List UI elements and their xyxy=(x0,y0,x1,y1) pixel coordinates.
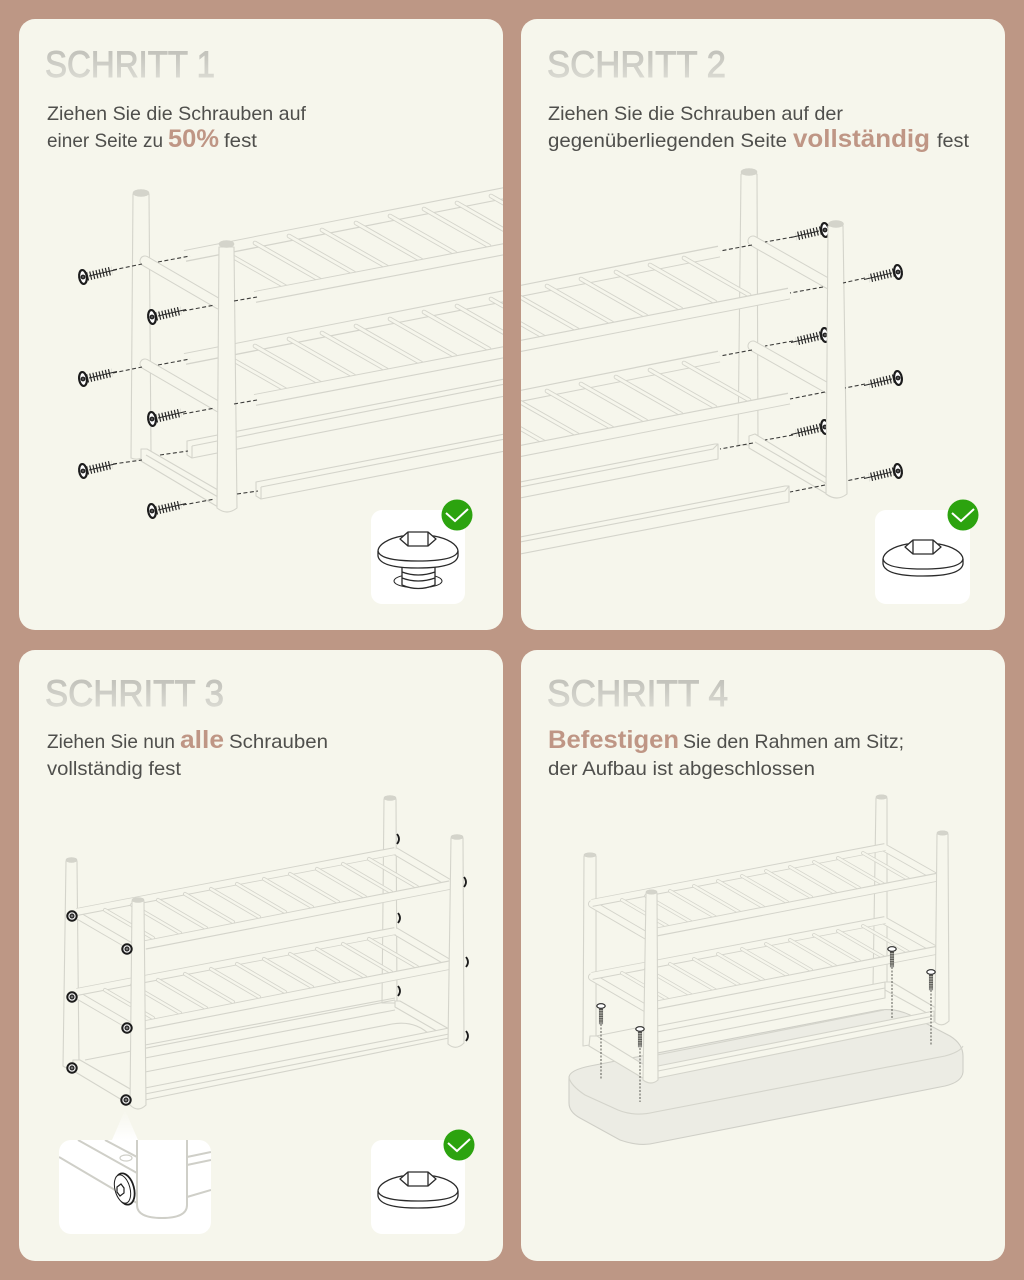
bottom frame xyxy=(589,982,936,1080)
back posts xyxy=(63,796,397,1069)
panel: Schritt 1 xyxy=(19,19,556,630)
text block: Schritt 4 instruction: der Aufbau ist abgeschlossen xyxy=(548,758,815,780)
text block: Schritt 3 instruction: Ziehen Sie nun xyxy=(47,731,175,753)
front post xyxy=(826,220,847,498)
heading: Schritt 2: SCHRITT 2 xyxy=(547,44,726,85)
lower shelf xyxy=(479,356,790,452)
text block: Schritt 1 instruction xyxy=(47,103,307,153)
icon: check mark xyxy=(444,1130,474,1160)
text block: Schritt 4 instruction xyxy=(548,726,904,780)
text block: Schritt 2 instruction: vollständig xyxy=(793,125,930,153)
lower shelf xyxy=(591,920,939,1005)
text block: Schritt 2 instruction: fest xyxy=(937,130,970,152)
side rails xyxy=(77,851,451,1027)
text block: Schritt 4 instruction: Befestigen xyxy=(548,726,679,754)
icon: check mark xyxy=(442,500,472,530)
dashed screw guides xyxy=(601,967,931,1102)
detail card: screw tight xyxy=(875,500,978,604)
rack on seat diagram xyxy=(569,795,963,1144)
back post xyxy=(738,168,758,445)
side rails xyxy=(749,241,829,494)
text block: Schritt 2 instruction xyxy=(548,103,970,153)
back posts xyxy=(583,795,887,1046)
back post xyxy=(131,190,151,459)
upper shelf xyxy=(76,851,451,945)
text block: Schritt 1 instruction: fest xyxy=(224,130,258,152)
text block: Schritt 3 instruction: Schrauben xyxy=(229,731,328,753)
heading: Schritt 3: SCHRITT 3 xyxy=(45,673,224,714)
dashed screw guides xyxy=(720,237,865,492)
screws xyxy=(597,947,935,1047)
heading: Schritt 1: SCHRITT 1 xyxy=(45,44,215,85)
panel: Schritt 3 xyxy=(19,650,503,1261)
front post xyxy=(217,240,237,512)
bottom bars xyxy=(515,444,789,555)
back screws xyxy=(791,223,830,434)
front screws xyxy=(864,265,903,478)
text block: Schritt 1 instruction: 50% xyxy=(168,125,219,153)
panel: Schritt 4 xyxy=(521,650,1005,1261)
text block: Schritt 2 instruction: gegenüberliegenden Seite xyxy=(548,130,787,152)
side rails xyxy=(141,261,219,507)
side rails xyxy=(592,848,938,1009)
front posts xyxy=(130,834,464,1109)
heading: Schritt 4: SCHRITT 4 xyxy=(547,673,728,714)
exploded rack diagram: opposite side fully tightened xyxy=(479,168,903,555)
left screw heads xyxy=(67,911,132,1105)
callout: zoom on screw xyxy=(59,1123,211,1234)
text block: Schritt 3 instruction xyxy=(47,726,328,780)
front posts xyxy=(643,831,949,1083)
bottom frame xyxy=(72,998,449,1106)
seat xyxy=(569,1010,963,1144)
callout screw head xyxy=(112,1171,138,1207)
lower shelf xyxy=(76,931,451,1025)
text block: Schritt 3 instruction: vollständig fest xyxy=(47,758,182,780)
panel: Schritt 2 xyxy=(479,19,1005,630)
washer and thread xyxy=(394,564,442,588)
icon: check mark xyxy=(948,500,978,530)
callout rack detail xyxy=(59,1140,211,1218)
upper shelf xyxy=(184,193,556,297)
exploded rack diagram: one side half tightened xyxy=(78,187,503,519)
text block: Schritt 1 instruction: Ziehen Sie die Schrauben auf xyxy=(47,103,307,125)
lower shelf xyxy=(184,296,556,400)
text block: Schritt 2 instruction: Ziehen Sie die Schrauben auf der xyxy=(548,103,844,125)
text block: Schritt 4 instruction: Sie den Rahmen am Sitz; xyxy=(683,731,904,753)
bottom bars xyxy=(187,378,510,499)
text block: Schritt 1 instruction: einer Seite zu xyxy=(47,130,163,152)
right screw heads xyxy=(397,834,468,1041)
text block: Schritt 3 instruction: alle xyxy=(180,726,224,754)
detail card: screw half tightened xyxy=(371,500,472,604)
assembled rack diagram xyxy=(63,796,468,1109)
upper shelf xyxy=(591,847,939,932)
detail card: screw tight xyxy=(371,1130,474,1234)
dashed screw guides xyxy=(113,256,258,505)
upper shelf xyxy=(479,252,790,347)
screws xyxy=(78,270,186,518)
